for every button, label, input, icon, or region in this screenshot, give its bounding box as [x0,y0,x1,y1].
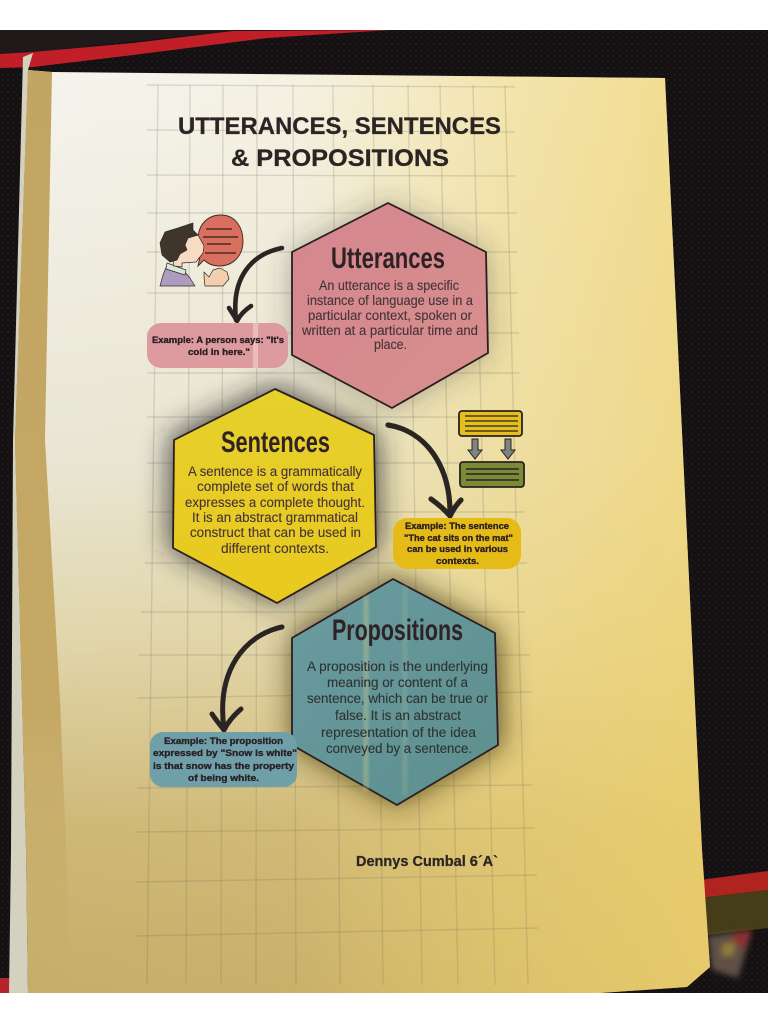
callout: proposition example: of being white. [188,773,259,784]
text: utterance definition [301,278,478,352]
text: utterance definition: An utterance is a specific [319,278,459,293]
callout: sentence example: contexts. [436,556,479,567]
text: proposition definition: representation of the idea [321,725,477,740]
speaker icon [160,215,243,286]
text: utterance definition: particular context, spoken or [308,308,473,323]
callout: proposition example [150,732,297,787]
callout: sentence example [393,518,521,569]
callout: sentence example: Example: The sentence [405,521,509,532]
heading: propositions: Propositions [332,614,463,647]
text: sentence definition: A sentence is a grammatically [188,464,362,479]
text: proposition definition: A proposition is the underlying [307,659,488,674]
callout: sentence example: "The cat sits on the mat" [404,533,513,544]
text: utterance definition: written at a particular time and [301,323,478,338]
callout: proposition example: is that snow has the property [153,761,295,772]
author credit: Dennys Cumbal 6´A` [356,854,498,870]
arrow: utterance to example [229,248,282,321]
red fabric bottom left [0,978,10,993]
text: sentence definition [185,464,365,556]
callout: sentence example: can be used in various [407,544,508,555]
text: proposition definition [307,659,489,756]
person [160,223,229,286]
callout: proposition example: expressed by "Snow is white" [153,748,297,759]
title: & PROPOSITIONS [231,145,449,172]
title: UTTERANCES, SENTENCES [178,113,501,140]
text: proposition definition: meaning or content of a [327,675,469,690]
icon: grammar blocks [459,411,524,487]
red band top left [0,30,390,68]
text: sentence definition: different contexts. [221,541,329,556]
text: utterance definition: place. [374,337,407,352]
text: proposition definition: conveyed by a sentence. [326,741,472,756]
arrow: sentence to example [388,425,461,516]
folded white paper strip [9,53,33,993]
text: sentence definition: complete set of words that [197,479,354,494]
heading: sentences: Sentences [221,426,330,459]
text: proposition definition: false. It is an abstract [335,708,461,723]
panel: sentences hexagon [173,389,376,603]
soft shadows around the hexagons [169,203,502,805]
text: sentence definition: construct that can be used in [190,525,361,540]
title [178,113,501,172]
text: utterance definition: instance of language use in a [307,293,474,308]
arrow: proposition to example [212,627,282,730]
panel: utterances hexagon [292,203,488,408]
grid lines [135,85,538,985]
speech bubble [198,215,243,266]
red and olive fabric lower right [700,871,768,978]
callout: proposition example: Example: The proposition [164,736,283,747]
callout: utterance example: cold in here." [188,347,250,358]
text: proposition definition: sentence, which can be true or [307,691,489,706]
panel: propositions hexagon [292,579,498,805]
heading: utterances: Utterances [331,242,445,275]
callout: utterance example: Example: A person says: "It's [152,335,284,346]
callout: utterance example [147,323,288,368]
text: sentence definition: It is an abstract grammatical [192,510,358,525]
text: sentence definition: expresses a complete thought. [185,495,365,510]
